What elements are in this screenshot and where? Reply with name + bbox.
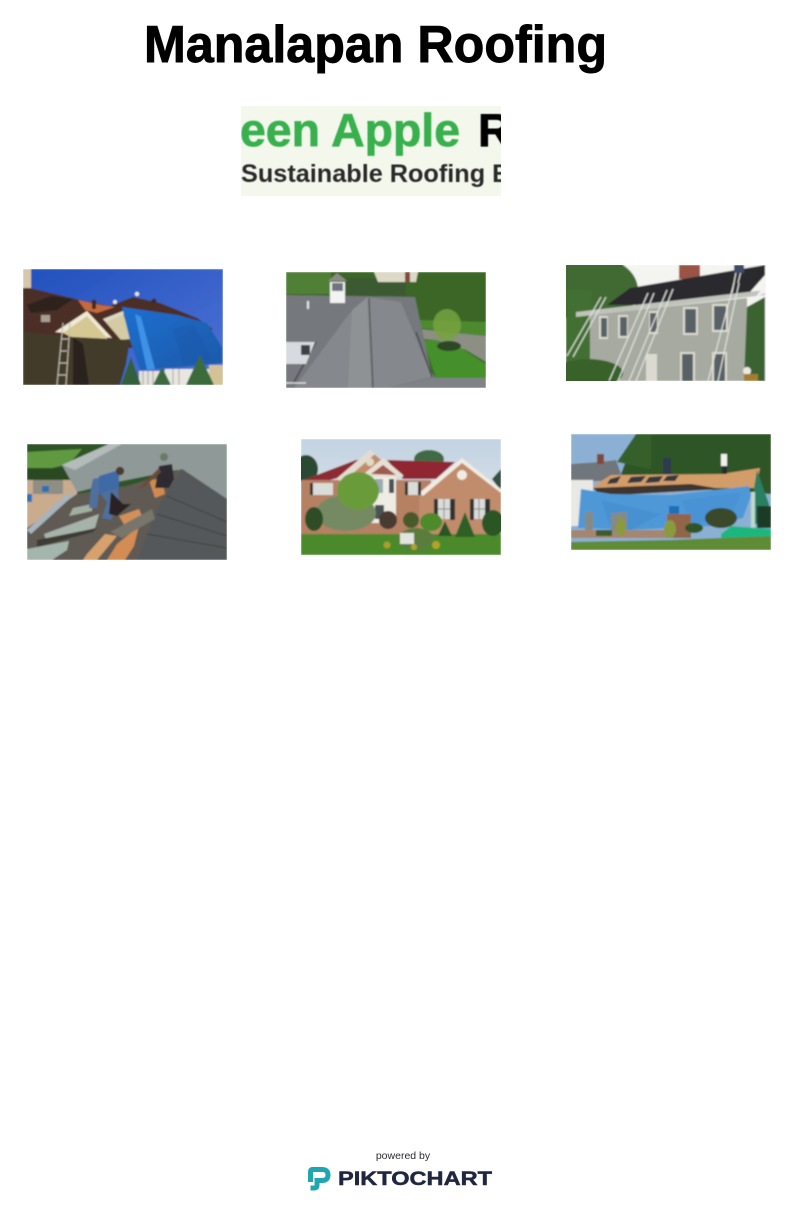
title: Manalapan Roofing <box>144 16 607 74</box>
logo: Green Apple banner: Sustainable Roofing E <box>241 160 501 188</box>
powered by label: powered by <box>376 1150 431 1162</box>
photo: gray house with ladders against the roof <box>566 265 766 381</box>
wordmark: PIKTOCHART <box>338 1169 492 1190</box>
icon: Piktochart logo mark <box>310 1170 328 1188</box>
photo: aerial view of gray shingle roof <box>286 272 486 388</box>
photo: roof covered with blue and black tarps <box>23 269 223 385</box>
photo: brick house with red roof <box>301 439 501 555</box>
logo: Green Apple banner <box>241 106 501 196</box>
photo: house with blue tarp over stripped roof <box>571 434 771 550</box>
photo: roofers tearing off damaged shingles <box>27 444 227 560</box>
footer: powered by Piktochart <box>308 1150 492 1190</box>
